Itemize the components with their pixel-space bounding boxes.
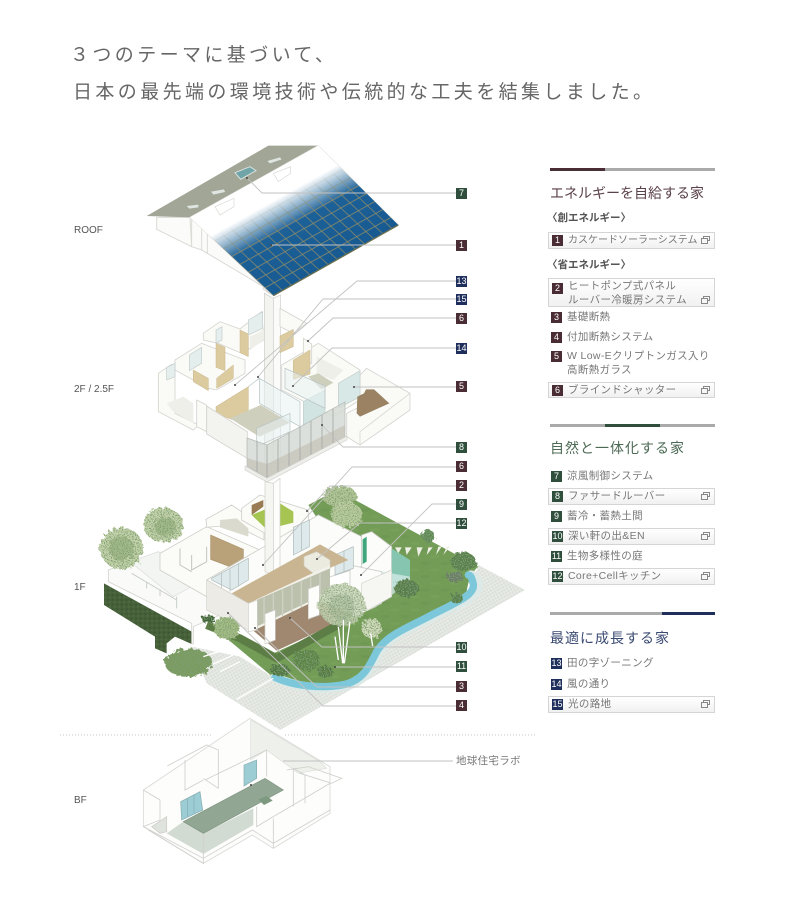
- front wall left room: [207, 406, 247, 458]
- panel: house integrated with nature: [548, 424, 715, 585]
- tag 3: [456, 681, 467, 692]
- upper rooms: [160, 495, 308, 597]
- section bar: [550, 612, 715, 615]
- back tree: [323, 486, 363, 528]
- leader dots: [227, 177, 362, 786]
- tag 12: 12: [456, 518, 466, 528]
- shrubs: [164, 529, 476, 678]
- tag 6: 6: [459, 313, 464, 323]
- tag 11: 11: [457, 661, 466, 671]
- first floor and garden: [100, 478, 525, 730]
- item 10: 深い軒の出&EN: [568, 530, 645, 542]
- item 12: [548, 568, 715, 585]
- item 15: 光の路地: [568, 698, 611, 710]
- subheading create energy: 〈創エネルギー〉: [547, 212, 631, 224]
- item 8: ファサードルーバー: [568, 490, 666, 502]
- tag 8: [456, 442, 467, 453]
- lower green wall: [167, 808, 253, 854]
- exploded house illustration: [60, 145, 535, 864]
- leader lines: [228, 178, 456, 761]
- grey room panel: [220, 518, 248, 537]
- item 2: 2: [555, 283, 560, 293]
- inner wall shading: [167, 330, 343, 423]
- item 14: 14: [551, 679, 562, 689]
- item 11: 11: [552, 551, 561, 561]
- basement floor plan: [143, 718, 342, 863]
- heading: 自然と一体化する家: [550, 440, 685, 456]
- item 5: W Low-Eクリプトンガス入り: [567, 350, 710, 362]
- tag 5: 5: [459, 381, 464, 391]
- floor label: 1F: 1F: [74, 582, 86, 593]
- solar panel slope: [190, 146, 398, 296]
- item 6: ブラインドシャッター: [568, 384, 676, 396]
- front stone steps: [203, 648, 273, 699]
- interior glass walls: [248, 368, 325, 447]
- green mat: [252, 503, 293, 529]
- balcony rim: [360, 393, 410, 445]
- tag 1: [456, 240, 467, 251]
- tag 2: [456, 480, 467, 491]
- tag 4: 4: [459, 700, 464, 710]
- tag 10: 10: [456, 642, 466, 652]
- central shaft lower: [265, 478, 280, 575]
- item 10: 10: [552, 531, 562, 541]
- paving: [192, 565, 525, 730]
- tag 5: [456, 381, 467, 392]
- tag 1: 1: [459, 240, 464, 250]
- item 3: 基礎断熱: [567, 311, 610, 323]
- second floor plan: [158, 308, 410, 458]
- kitchen counter: [304, 552, 330, 576]
- floor slabs: [230, 373, 333, 437]
- white columns: [248, 585, 319, 644]
- item 1: カスケードソーラーシステム: [568, 235, 698, 246]
- floor label: roof: ROOF: [74, 225, 103, 236]
- item 11: 生物多様性の庭: [567, 550, 643, 562]
- item 6: [548, 382, 715, 398]
- lawn: [207, 490, 478, 685]
- heading: エネルギーを自給する家: [550, 185, 704, 201]
- tag 6: [456, 313, 467, 324]
- interior lines: [143, 745, 342, 863]
- windows: [167, 312, 360, 425]
- end wall: [207, 580, 248, 630]
- item 7: 7: [554, 471, 559, 481]
- item 2: [548, 278, 715, 307]
- tag 6 lower: 6: [459, 461, 464, 471]
- item 8: 8: [555, 491, 560, 501]
- wood storage wall: [211, 535, 243, 572]
- item 3: 3: [554, 312, 559, 322]
- item 5: 5: [554, 351, 559, 361]
- north roof slope with skylights: [147, 146, 318, 217]
- section bar: [550, 424, 715, 427]
- item 7: 涼風制御システム: [567, 470, 654, 482]
- item 9: 蓄冷・蓄熱土間: [567, 510, 643, 522]
- deck: [183, 778, 283, 833]
- left trees: [100, 508, 183, 569]
- tan panels: [193, 329, 310, 420]
- item 12: Core+Cellキッチン: [568, 570, 662, 582]
- section bar: [550, 168, 715, 171]
- dotted separator: [60, 734, 535, 736]
- item 9: 9: [554, 511, 559, 521]
- tag 7: 7: [459, 188, 464, 198]
- title: 日本の最先端の環境技術や伝統的な工夫を結集しました。: [73, 82, 655, 103]
- roof: [147, 146, 398, 463]
- planting: [100, 486, 476, 678]
- item 15: 15: [552, 699, 562, 709]
- item 13: 田の字ゾーニング: [567, 657, 654, 669]
- item 6: 6: [555, 385, 560, 395]
- title: [70, 45, 655, 103]
- tag 13: 13: [456, 276, 466, 286]
- item 4: 4: [554, 332, 559, 342]
- gable wall under roof: [157, 217, 272, 295]
- ground floor facade: [248, 565, 353, 650]
- panel: optimally growing house: [548, 612, 715, 713]
- item 2: ヒートポンプ式パネル: [568, 280, 676, 292]
- tag 14: 14: [456, 343, 466, 353]
- back wall shade: [251, 720, 327, 773]
- title: ３つのテーマに基づいて、: [70, 45, 337, 66]
- tag 6 lower: [456, 461, 467, 472]
- wood deck: [253, 600, 353, 651]
- panel: energy self-sufficient house: [547, 168, 715, 398]
- blue windows: [181, 760, 257, 820]
- stepping planks: [395, 547, 450, 557]
- glazing: [212, 520, 353, 592]
- item 8: [548, 488, 715, 505]
- deck hedge: [207, 617, 353, 658]
- tag 3: 3: [459, 681, 464, 691]
- item 5: [551, 350, 710, 376]
- balcony deck: [357, 389, 389, 417]
- terrace wall and hedge: [104, 552, 247, 653]
- item 1: 1: [555, 235, 560, 245]
- right terrace base: [362, 570, 392, 610]
- left room partitions: [180, 547, 207, 572]
- louver facade: [245, 402, 347, 482]
- tag 15: 15: [456, 294, 466, 304]
- floor label: BF: BF: [74, 795, 87, 806]
- tag 9: 9: [459, 499, 464, 509]
- item 10: [548, 528, 715, 545]
- green glass: [392, 548, 410, 588]
- small deck tab: [258, 796, 273, 805]
- patio glass: [382, 572, 410, 600]
- basement shell: [143, 718, 330, 863]
- tag 4: [456, 700, 467, 711]
- heading: 最適に成長する家: [550, 630, 670, 646]
- item 2: ルーバー冷暖房システム: [568, 294, 687, 306]
- tag 9: [456, 499, 467, 510]
- tag 2: 2: [459, 480, 464, 490]
- ceiling slab: [232, 544, 348, 603]
- birch canopy: [318, 583, 382, 638]
- basement label: 地球住宅ラボ: [456, 755, 521, 767]
- item 14: 風の通り: [567, 678, 610, 690]
- birch trunks: [335, 620, 373, 663]
- main house walls: [207, 515, 392, 610]
- item 12: 12: [552, 571, 562, 581]
- wall shells: [158, 308, 410, 445]
- item 4: 付加断熱システム: [567, 331, 654, 343]
- item 5: 高断熱ガラス: [567, 364, 632, 376]
- item 1: [548, 232, 715, 249]
- tag 8: 8: [459, 442, 464, 452]
- floor label: 2F: 2F / 2.5F: [74, 384, 114, 395]
- item 15: [548, 696, 715, 713]
- stream: [275, 575, 479, 688]
- central shaft upper: [264, 293, 281, 463]
- subheading save energy: 〈省エネルギー〉: [547, 259, 631, 271]
- item 13: 13: [551, 658, 562, 668]
- tag 7: [456, 188, 467, 199]
